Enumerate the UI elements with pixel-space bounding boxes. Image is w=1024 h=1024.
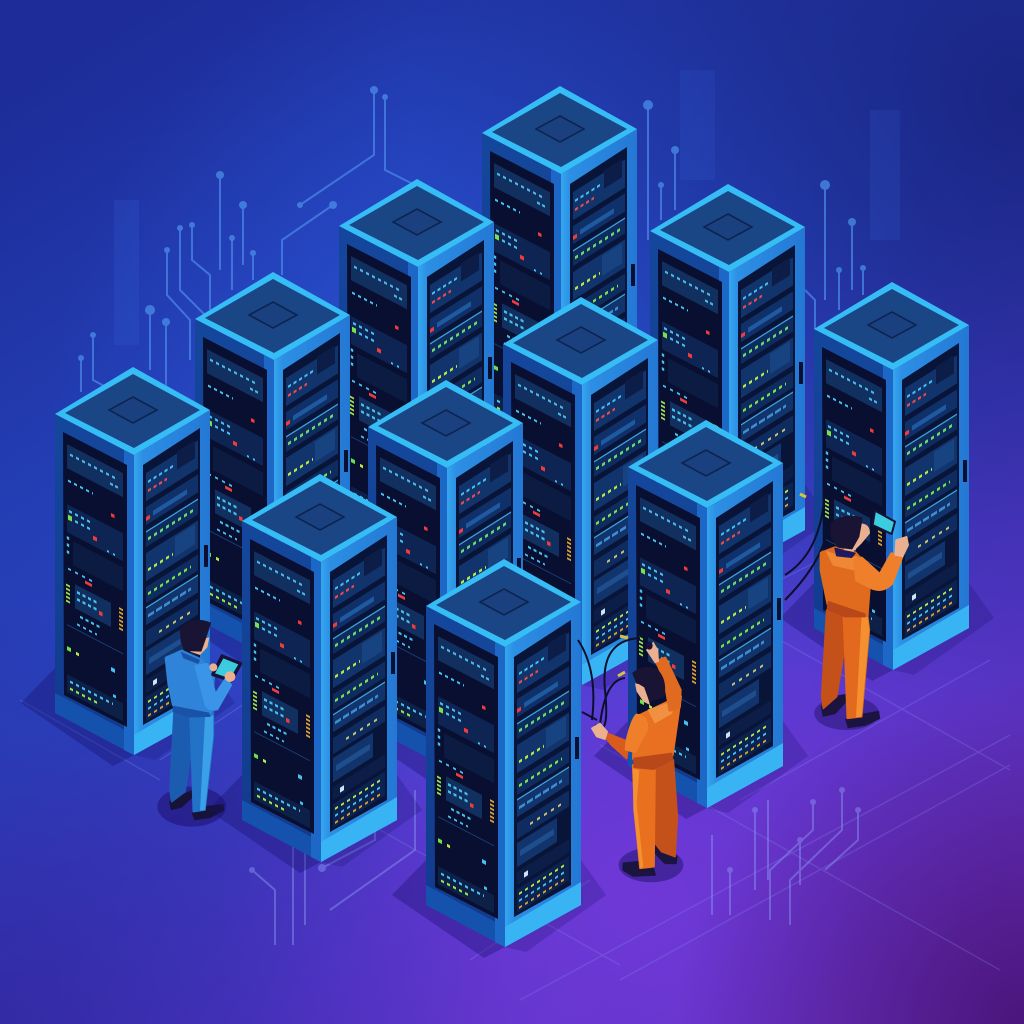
server rack: back left	[305, 179, 519, 578]
server rack: front right	[594, 420, 808, 819]
server rack: back center	[448, 86, 662, 485]
server rack: front center	[392, 559, 606, 958]
circuit traces upper	[78, 86, 866, 400]
server rack: back right	[616, 184, 830, 583]
technician: orange uniform reaching up	[592, 642, 683, 882]
server rack: center	[469, 297, 683, 696]
technician: blue uniform with tablet	[157, 621, 242, 827]
circuit traces lower	[249, 787, 861, 945]
server rack: second row left	[161, 272, 375, 671]
technician: orange uniform with tablet held up	[814, 511, 908, 730]
server rack: inner center	[334, 380, 548, 779]
server rack: front left	[208, 474, 422, 873]
network cables	[578, 480, 825, 728]
server rack: far right	[780, 282, 994, 681]
server rack: far left	[21, 367, 235, 766]
floor grid lines	[20, 560, 1010, 1000]
